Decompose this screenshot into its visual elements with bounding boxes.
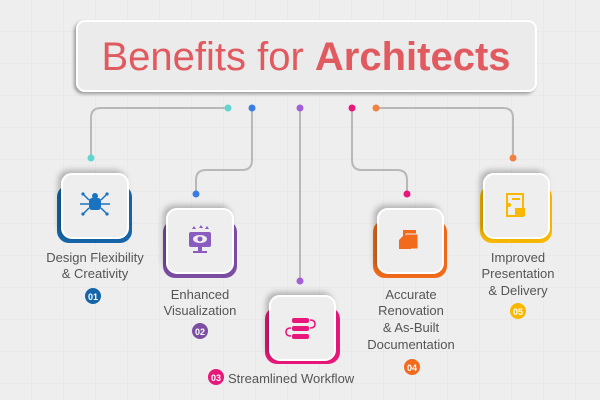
card 4: accurate renovation: Documentation xyxy=(367,337,455,352)
icon: workflow stack xyxy=(286,318,315,339)
card 2: enhanced visualization: 02 xyxy=(195,327,205,337)
card 5: improved presentation: Improved xyxy=(491,250,545,265)
card 2: enhanced visualization: Enhanced xyxy=(171,287,229,302)
card 4: accurate renovation: Accurate xyxy=(385,287,437,302)
card 3: streamlined workflow xyxy=(208,296,355,386)
card 1: design flexibility: & Creativity xyxy=(62,266,129,281)
title xyxy=(77,21,536,91)
title: Benefits for Architects xyxy=(101,35,511,79)
card 5: improved presentation: 05 xyxy=(513,307,523,317)
card 3: streamlined workflow: Streamlined Workflow xyxy=(228,371,355,386)
icon: eye monitor xyxy=(189,225,211,253)
icon: house document xyxy=(399,230,418,249)
icon: presentation board xyxy=(507,194,525,216)
connector dots xyxy=(88,104,516,284)
card 1: design flexibility xyxy=(46,174,144,304)
card 4: accurate renovation: 04 xyxy=(407,363,417,373)
icon: network figure xyxy=(80,192,110,216)
card 2: enhanced visualization: Visualization xyxy=(164,303,236,318)
card 1: design flexibility: Design Flexibility xyxy=(46,250,144,265)
connectors xyxy=(91,108,513,281)
card 4: accurate renovation xyxy=(367,209,455,375)
card 5: improved presentation: Presentation xyxy=(482,266,554,281)
card 4: accurate renovation: Renovation xyxy=(378,303,444,318)
card 3: streamlined workflow: 03 xyxy=(211,373,221,383)
card 2: enhanced visualization xyxy=(163,209,237,339)
card 5: improved presentation xyxy=(480,174,554,319)
card 1: design flexibility: 01 xyxy=(88,292,98,302)
card 4: accurate renovation: & As-Built xyxy=(383,320,440,335)
card 5: improved presentation: & Delivery xyxy=(488,283,548,298)
